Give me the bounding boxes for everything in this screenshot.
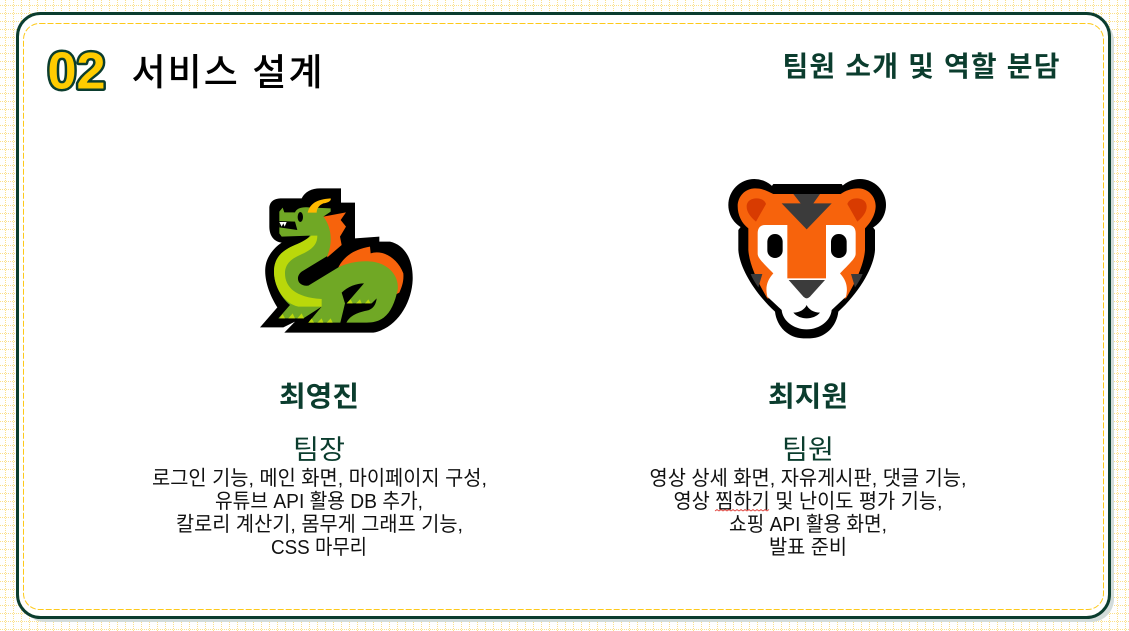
member 2 duties: 발표 준비 [769,536,847,559]
member 1 name: 최영진 [279,381,359,412]
title: 서비스 설계 [132,52,322,93]
icon: tiger [728,179,886,338]
member 2 role: 팀원 [782,435,834,465]
member 2 duties [650,467,966,559]
subtitle: 팀원 소개 및 역할 분담 [782,51,1060,82]
member 1 duties: 칼로리 계산기, 몸무게 그래프 기능, [176,513,463,536]
member 1 duties: CSS 마무리 [271,536,367,559]
section number: 02 [48,42,106,100]
text block: member 2 [650,381,966,559]
text block: member 1 [152,381,487,559]
member 2 duties: 영상 상세 화면, 자유게시판, 댓글 기능, [650,467,966,490]
member 2 duties: 쇼핑 API 활용 화면, [729,513,887,536]
member 2 name: 최지원 [768,381,848,412]
icon: dragon [260,188,413,333]
member 1 duties: 유튜브 API 활용 DB 추가, [215,490,423,513]
member 1 role: 팀장 [293,435,345,465]
member 1 duties [152,467,487,559]
member 2 duties: 영상 찜하기 및 난이도 평가 기능, [674,490,942,513]
member 1 duties: 로그인 기능, 메인 화면, 마이페이지 구성, [152,467,487,490]
